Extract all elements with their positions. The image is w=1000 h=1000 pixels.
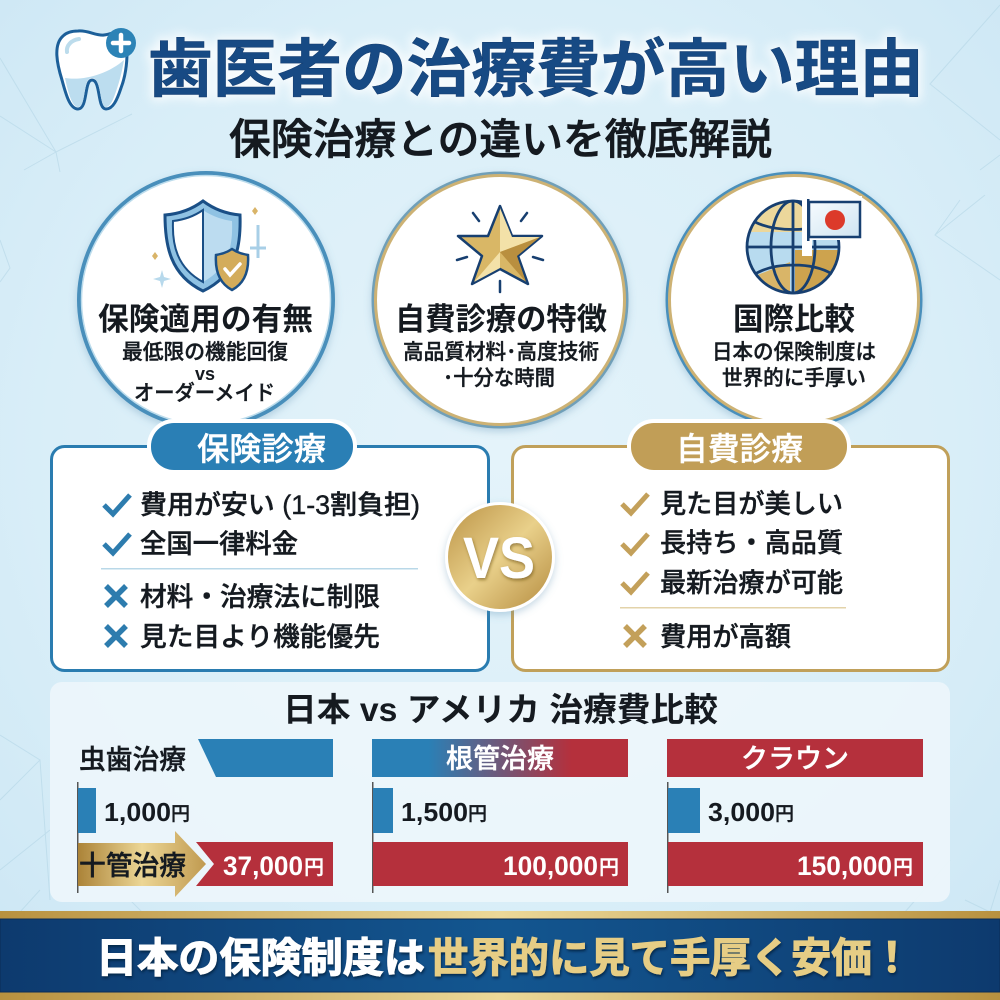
- icon: globe with flag: [745, 196, 862, 296]
- chart: cavity treatment: 円: [171, 804, 190, 825]
- badge: self-pay treatment: [627, 419, 851, 474]
- panel: international comparison circle: [667, 173, 921, 427]
- description: [712, 341, 876, 390]
- panel: self-pay treatment: [512, 419, 948, 670]
- description: 日本の保険制度は: [712, 341, 876, 364]
- chart: cavity treatment: [77, 739, 333, 897]
- cons list: 材料・治療法に制限: [140, 582, 380, 612]
- pros list: 長持ち・高品質: [660, 528, 843, 558]
- panel: Japan vs America cost comparison: [50, 682, 950, 902]
- icon: shield: [152, 201, 266, 291]
- badge: VS: [445, 502, 555, 612]
- description: [122, 341, 288, 405]
- subtitle: 保険治療との違いを徹底解説: [229, 116, 772, 163]
- chart: cavity treatment: 37,000: [223, 851, 303, 881]
- description: 高品質材料･高度技術: [403, 341, 599, 364]
- footer message: [96, 935, 912, 981]
- chart: cavity treatment: 虫歯治療: [79, 745, 186, 775]
- title: 歯医者の治療費が高い理由: [148, 35, 924, 105]
- chart title: 日本 vs アメリカ 治療費比較: [283, 691, 718, 728]
- chart: root canal treatment: 1,500: [401, 797, 468, 827]
- chart: crown: 150,000: [797, 851, 892, 881]
- chart: cavity treatment: 円: [304, 857, 324, 879]
- pros list: 費用が安い (1-3割負担): [140, 490, 420, 520]
- pros list: [622, 489, 843, 598]
- pros list: 最新治療が可能: [660, 568, 843, 598]
- badge: self-pay treatment: 自費診療: [676, 431, 803, 467]
- pros list: [104, 490, 420, 559]
- heading: 保険適用の有無: [98, 302, 313, 337]
- chart: root canal treatment: 円: [468, 804, 487, 825]
- heading: 国際比較: [733, 302, 855, 337]
- panel: self-pay circle: [373, 173, 627, 427]
- panel: insurance coverage circle: [79, 173, 333, 427]
- icon: star: [457, 206, 543, 292]
- description: ･十分な時間: [443, 367, 555, 390]
- pros list: 全国一律料金: [140, 529, 298, 559]
- heading: 自費診療の特徴: [395, 302, 607, 337]
- badge: insurance treatment: [147, 419, 357, 474]
- chart: root canal treatment: [372, 739, 628, 893]
- badge: insurance treatment: 保険診療: [197, 431, 326, 467]
- footer banner: [0, 911, 1000, 1000]
- chart: cavity treatment: 十管治療: [79, 851, 186, 881]
- chart: crown: 円: [775, 804, 794, 825]
- icon: tooth with plus: [57, 28, 136, 109]
- description: オーダーメイド: [134, 382, 275, 405]
- cons list: 見た目より機能優先: [140, 622, 380, 652]
- description: 最低限の機能回復: [122, 341, 288, 364]
- footer message: 世界的に見て手厚く安価！: [428, 935, 912, 981]
- description: vs: [195, 364, 215, 384]
- description: 世界的に手厚い: [722, 367, 866, 390]
- chart: crown: 円: [893, 857, 913, 879]
- footer message: 日本の保険制度は: [96, 935, 425, 981]
- badge: VS: VS: [463, 526, 535, 591]
- chart: root canal treatment: 根管治療: [446, 744, 554, 774]
- panel: insurance treatment: [52, 419, 488, 670]
- chart: root canal treatment: 円: [599, 857, 619, 879]
- chart: root canal treatment: 100,000: [503, 851, 598, 881]
- cons list: 費用が高額: [660, 622, 791, 652]
- description: [403, 341, 599, 390]
- chart: cavity treatment: 1,000: [104, 797, 171, 827]
- cons list: [106, 582, 380, 652]
- chart: crown: 3,000: [708, 797, 775, 827]
- chart: crown: [667, 739, 923, 893]
- title: 歯医者の治療費が高い理由: [148, 35, 924, 105]
- pros list: 見た目が美しい: [660, 489, 843, 519]
- chart: crown: クラウン: [741, 744, 849, 774]
